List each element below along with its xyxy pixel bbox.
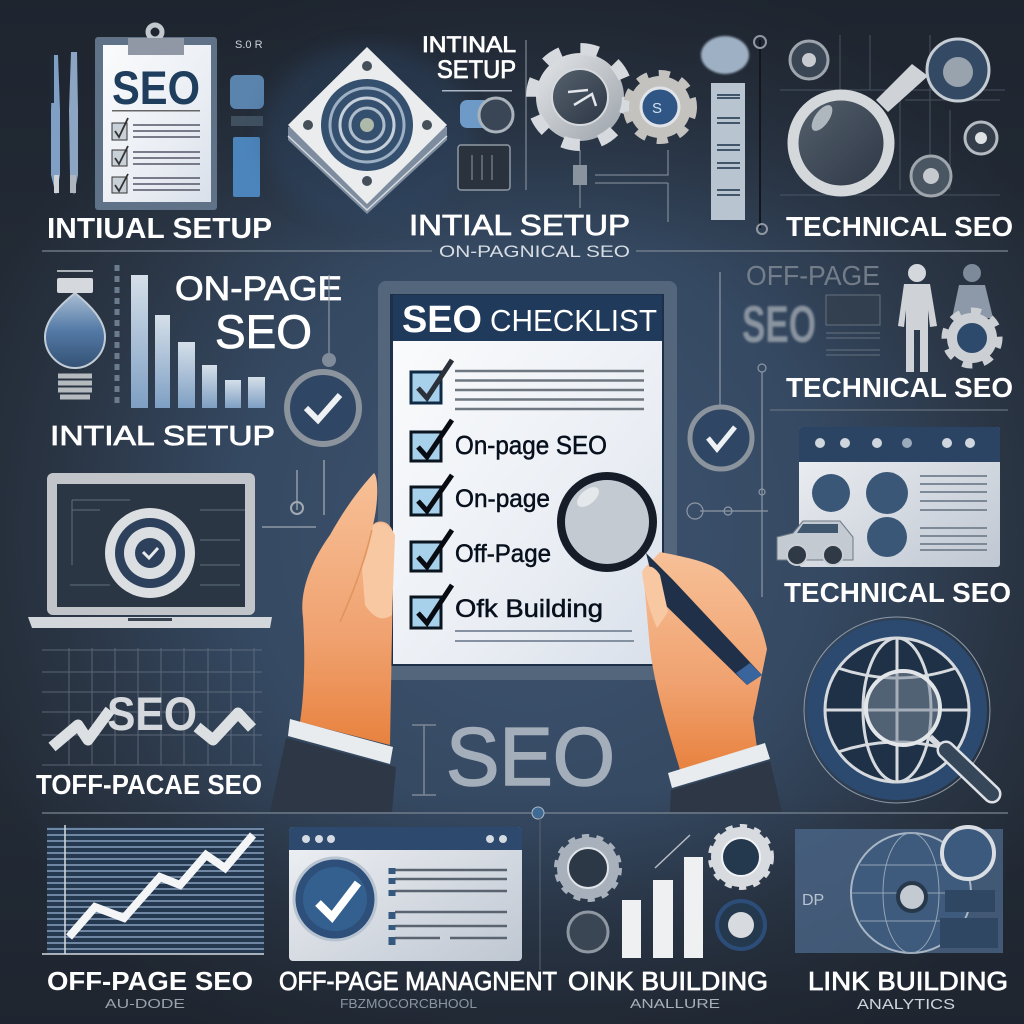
checklist item 3: On-page [455, 485, 550, 513]
panel: off-page management window [289, 827, 522, 961]
right connector lines [687, 272, 768, 597]
panel: SEO checklist tablet [378, 281, 677, 680]
icon: check badge right [690, 407, 752, 469]
heading: INTIAL SETUP center: INTIAL SETUP [409, 210, 630, 242]
checklist item 4: Off-Page [455, 540, 551, 568]
icon: pen [646, 553, 762, 685]
heading: OFF-PAGE MANAGNENT: OFF-PAGE MANAGNENT [279, 966, 557, 996]
tablet paper [393, 341, 662, 664]
panel: link building analytics dashboard [795, 827, 1003, 953]
icon: small gear: S [652, 100, 662, 117]
heading: OFF-PAGE SEO: OFF-PAGE SEO [47, 966, 253, 996]
heading: INTINAL SETUP small: INTINAL [422, 32, 516, 57]
left cuff and sleeve [270, 719, 396, 812]
caption: illegible sub text: FBZMOCORCBHOOL [340, 996, 477, 1011]
icon: car [777, 521, 853, 565]
heading: INTINAL SETUP small: SETUP [437, 56, 516, 84]
icon: check badge left [262, 275, 359, 527]
tablet header [393, 295, 662, 341]
icon: magnifier [793, 64, 928, 191]
panel: initial setup diamond [263, 45, 473, 225]
icon: laptop [28, 473, 272, 628]
text strip [114, 265, 120, 408]
icon: small gear [627, 74, 693, 140]
tablet header: CHECKLIST [490, 303, 657, 338]
heading: TECHNICAL SEO top right: TECHNICAL SEO [786, 211, 1013, 242]
tablet header: SEO [402, 299, 482, 341]
icon: code strip [711, 36, 767, 234]
panel: gears and code strip [526, 36, 767, 234]
right hand with pen [642, 552, 767, 770]
caption: ANALLURE: ANALLURE [630, 996, 720, 1011]
panel: technical seo magnifier [780, 35, 1005, 196]
icon: magnifying glass over checklist [561, 476, 653, 568]
icon: small camera items [442, 90, 513, 190]
heading: OINK BUILDING: OINK BUILDING [568, 966, 768, 996]
chart: off-page growth line [42, 825, 264, 954]
icon: pens [50, 52, 78, 195]
checklist item 2 [411, 420, 607, 461]
checklist item 5: Ofk Building [455, 595, 603, 623]
heading: INTIUAL SETUP top left: INTIUAL SETUP [47, 213, 272, 245]
icon: clipboard [95, 25, 217, 210]
chart: SEO trend line: SEO [107, 687, 197, 740]
heading: LINK BUILDING: LINK BUILDING [808, 966, 1008, 996]
panel: browser window with icons [777, 427, 1000, 567]
right cuff and sleeve [668, 743, 782, 812]
bar chart [622, 857, 703, 958]
icon: lens blob [701, 36, 749, 74]
heading: TECHNICAL SEO lower right: TECHNICAL SEO [784, 577, 1011, 608]
icon: check badge [294, 858, 376, 940]
icon: light bulb [45, 270, 105, 397]
heading: ON-PAGE SEO: SEO [215, 305, 312, 358]
heading: ON-PAGE SEO [175, 270, 342, 358]
icon: small dials [790, 39, 997, 196]
icon: clipboard: SEO [112, 61, 200, 114]
icon: globe with magnifier [804, 617, 992, 803]
icon: people and gear [898, 264, 999, 372]
thin divider [770, 409, 1008, 411]
heading: ON-PAGE SEO: ON-PAGE [175, 270, 342, 308]
panel: on-page seo chart [45, 265, 342, 408]
heading: TECHNICAL SEO right: TECHNICAL SEO [786, 372, 1013, 403]
caption: AU-DODE: AU-DODE [105, 996, 185, 1011]
top divider [42, 250, 1008, 252]
heading: OFF-PAGE faded: OFF-PAGE [746, 260, 880, 291]
heading: SEO large: SEO [446, 710, 615, 803]
panel: initial setup clipboard [50, 25, 264, 210]
panel: link building gears and bars [557, 827, 771, 958]
heading: TOFF-PACAE SEO: TOFF-PACAE SEO [36, 769, 262, 800]
target icon [105, 508, 195, 598]
checklist item 2: On-page SEO [455, 430, 607, 460]
subheading: ON-PAGNICAL SEO: ON-PAGNICAL SEO [439, 242, 630, 261]
heading: OFF-PAGE faded: SEO [742, 296, 816, 354]
checklist item 4 [411, 530, 551, 571]
bottom divider [42, 807, 1008, 970]
heading: INTIAL SETUP left: INTIAL SETUP [50, 420, 275, 451]
heading: OFF-PAGE faded [742, 260, 880, 355]
bar chart [131, 275, 265, 408]
checklist item 3 [411, 475, 550, 515]
icon: large gear [532, 49, 628, 185]
checklist item 5 [411, 585, 634, 641]
heading: INTINAL SETUP small [422, 32, 516, 84]
left hand holding tablet [300, 473, 395, 745]
panel: link building analytics dashboard: DP [802, 892, 824, 909]
icon: small check sketch [412, 725, 436, 795]
caption: ANALYTICS: ANALYTICS [857, 996, 955, 1013]
icon: side items [230, 39, 264, 197]
chart: SEO trend line [42, 648, 262, 765]
icon: side items: S.0 R [235, 39, 263, 51]
checklist item 1 lines [411, 360, 644, 409]
